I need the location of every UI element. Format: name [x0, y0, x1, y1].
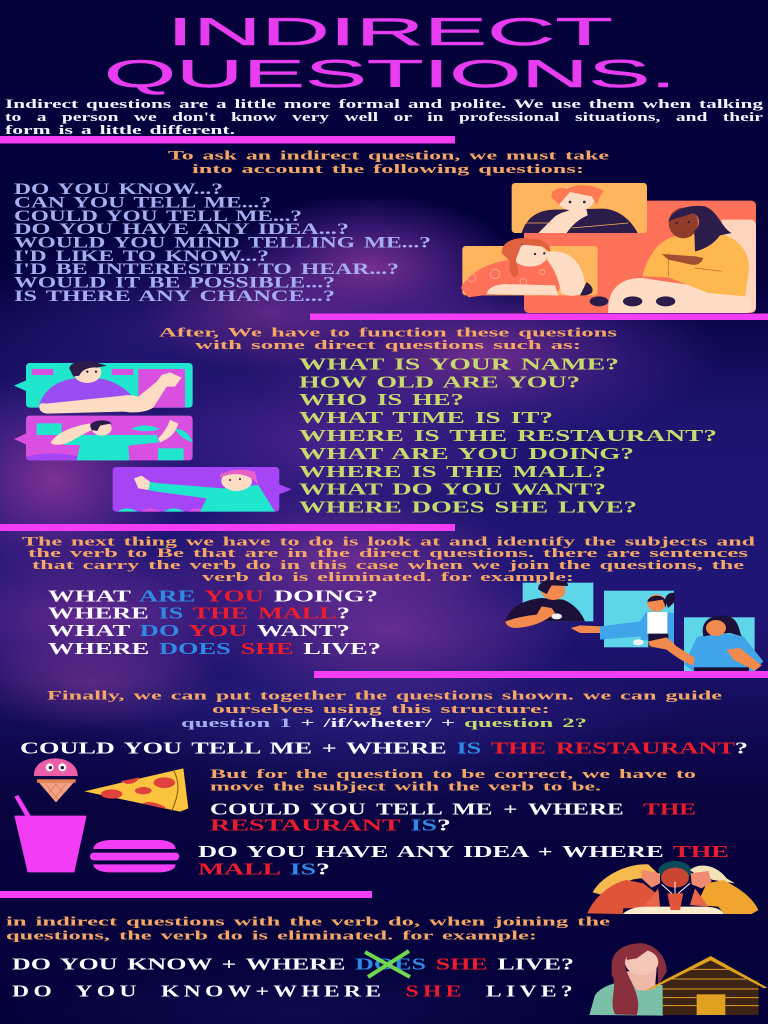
corrected example sentences: RESTAURANT IS ? — [210, 816, 451, 834]
highlighted subject and verb examples: WHERE IS THE MALL ? — [48, 604, 350, 622]
illustration: three people on cyan panels — [505, 580, 763, 671]
title — [104, 11, 676, 96]
list of direct questions — [299, 354, 717, 516]
intro text — [5, 96, 764, 137]
list of indirect question openers: WOULD IT BE POSSIBLE...? — [14, 274, 335, 292]
section 2 heading: with some direct questions such as: — [195, 337, 581, 352]
section 4 paragraph and structure: ourselves using this structure: — [212, 701, 550, 716]
section 3 paragraph: The next thing we have to do is look at and identify the subjects and — [22, 534, 756, 548]
section 4 paragraph and structure — [47, 688, 722, 730]
section 1 heading — [168, 148, 609, 176]
section 3 paragraph: verb do is eliminated. for example: — [202, 569, 574, 584]
section 2 heading: After, We have to function these questions — [159, 324, 617, 340]
illustration: video call — [461, 183, 756, 313]
list of direct questions: WHERE IS THE RESTAURANT? — [299, 426, 717, 445]
highlighted subject and verb examples: WHERE DOES SHE LIVE? — [48, 639, 381, 658]
section 5 paragraph: in indirect questions with the verb do, when joining the — [6, 914, 610, 928]
list of direct questions: WHAT ARE YOU DOING? — [299, 444, 634, 463]
section 2 heading — [159, 324, 617, 352]
corrected example sentences: MALL IS ? — [198, 860, 330, 878]
explanatory text: move the subject — [210, 766, 696, 794]
icon: green cross over does — [365, 951, 410, 977]
intro text: form is a little different. — [5, 122, 235, 137]
section 5 paragraph — [6, 914, 610, 942]
highlighted subject and verb examples: WHAT DO YOU WANT? — [48, 621, 350, 640]
section 1 heading: To ask an indirect question, we must take — [168, 148, 609, 162]
section 3 paragraph — [22, 534, 756, 584]
list of indirect question openers: COULD YOU TELL ME...? — [14, 208, 302, 225]
explanatory text: move the subject: move the subject with the verb to be. — [210, 778, 601, 794]
list of indirect question openers: I'D BE INTERESTED TO HEAR...? — [14, 261, 399, 278]
section 5 paragraph: questions, the verb do is eliminated. for example: — [6, 928, 537, 942]
section 4 paragraph and structure: Finally, we can put together the questions shown. we can guide — [47, 688, 722, 702]
example sentence: where is the restaurant: COULD YOU TELL ME + WHERE IS THE RESTAURANT ? — [20, 738, 748, 758]
explanatory text: move the subject: But for the question to be correct, we have to — [210, 766, 696, 781]
intro text: to a person we don't know very well or in professional situations, and their — [5, 109, 763, 124]
highlighted subject and verb examples — [48, 586, 381, 658]
list of direct questions: WHERE IS THE MALL? — [299, 462, 606, 481]
list of indirect question openers: DO YOU KNOW...? — [14, 181, 223, 198]
list of indirect question openers — [14, 181, 431, 305]
final examples with crossed out verb: DO YOU KNOW + WHERE DOES SHE LIVE? — [12, 954, 574, 974]
corrected example sentences: DO YOU HAVE ANY IDEA + WHERE THE — [198, 842, 729, 861]
final examples with crossed out verb — [12, 954, 577, 1000]
corrected example sentences — [198, 800, 729, 878]
section 1 heading: into account the following questions: — [192, 161, 584, 176]
list of indirect question openers: IS THERE ANY CHANCE...? — [14, 288, 335, 305]
illustration: chat bubbles — [14, 361, 292, 512]
final examples with crossed out verb: DO YOU KNOW+WHERE SHE LIVE? — [12, 982, 577, 1000]
title: INDIRECT — [167, 11, 613, 54]
section 3 paragraph: the verb to Be that are in the direct questions. there are sentences — [28, 545, 748, 560]
illustration: food icons — [14, 758, 188, 872]
list of direct questions: WHO IS HE? — [299, 390, 464, 409]
list of indirect question openers: WOULD YOU MIND TELLING ME...? — [14, 234, 431, 252]
list of indirect question openers: CAN YOU TELL ME...? — [14, 194, 271, 212]
section 3 paragraph: that carry the verb do in this case when we join the questions, the — [32, 557, 744, 572]
list of indirect question openers: DO YOU HAVE ANY IDEA...? — [14, 221, 349, 238]
list of direct questions: HOW OLD ARE YOU? — [299, 372, 580, 392]
list of direct questions: WHAT TIME IS IT? — [299, 408, 553, 427]
list of direct questions: WHAT IS YOUR NAME? — [299, 354, 619, 374]
illustration: friends sharing a drink and woman with house — [587, 861, 767, 1016]
intro text: Indirect questions are a little more formal and polite. We use them when talking — [5, 96, 764, 111]
corrected example sentences: COULD YOU TELL ME + WHERE THE — [210, 800, 696, 818]
list of direct questions: WHERE DOES SHE LIVE? — [299, 498, 637, 516]
list of indirect question openers: I'D LIKE TO KNOW...? — [14, 248, 269, 265]
section 4 paragraph and structure: question 1 + /if/wheter/ + question 2? — [181, 715, 587, 730]
list of direct questions: WHAT DO YOU WANT? — [299, 480, 606, 498]
title: QUESTIONS. — [104, 53, 676, 96]
highlighted subject and verb examples: WHAT ARE YOU DOING? — [48, 586, 378, 606]
